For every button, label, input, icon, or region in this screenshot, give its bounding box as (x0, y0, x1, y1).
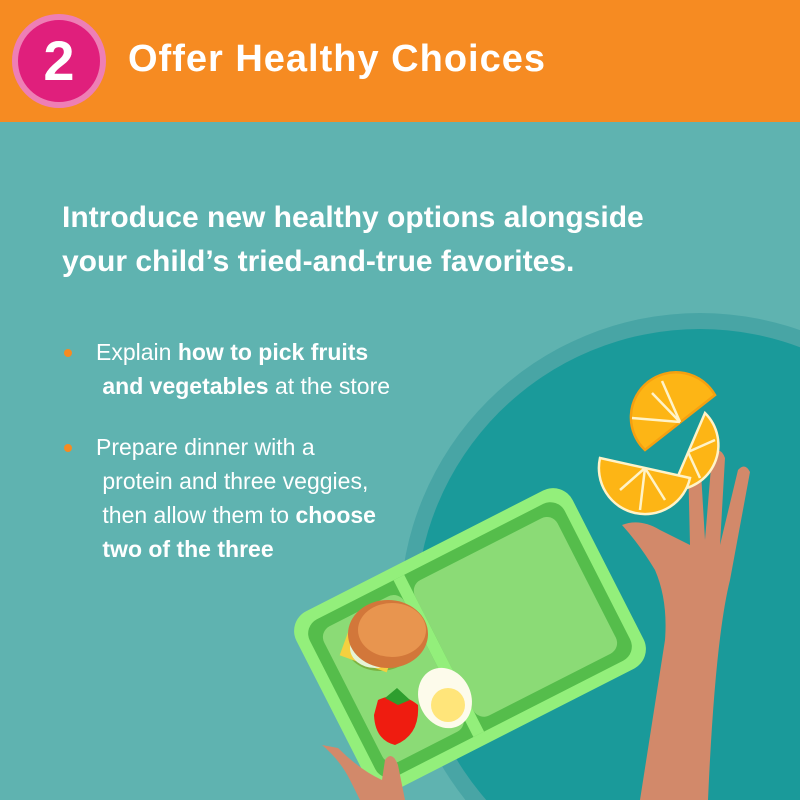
bullet 2: then allow them to choose (102, 502, 376, 528)
bullet 1 (64, 339, 390, 399)
number badge: 2 (43, 29, 75, 92)
left hand (322, 745, 405, 800)
bullet 2 (64, 434, 376, 562)
heading: your child’s tried-and-true favorites. (62, 245, 574, 278)
heading: Introduce new healthy options alongside (62, 201, 644, 234)
strawberry (374, 688, 418, 745)
bullet 1: Explain how to pick fruits (96, 339, 368, 365)
bullet 2: protein and three veggies, (102, 468, 368, 494)
burger (340, 600, 428, 672)
table circle (400, 313, 800, 800)
number badge (12, 14, 106, 108)
lunch tray (286, 481, 654, 799)
title: Offer Healthy Choices (128, 38, 546, 80)
oranges (599, 372, 718, 514)
egg (408, 659, 482, 737)
right arm (622, 451, 750, 800)
heading (62, 201, 644, 278)
bullet 1: and vegetables at the store (102, 373, 390, 399)
bullet 2: two of the three (102, 536, 274, 562)
header bar (0, 0, 800, 122)
bullet 2: Prepare dinner with a (96, 434, 315, 460)
